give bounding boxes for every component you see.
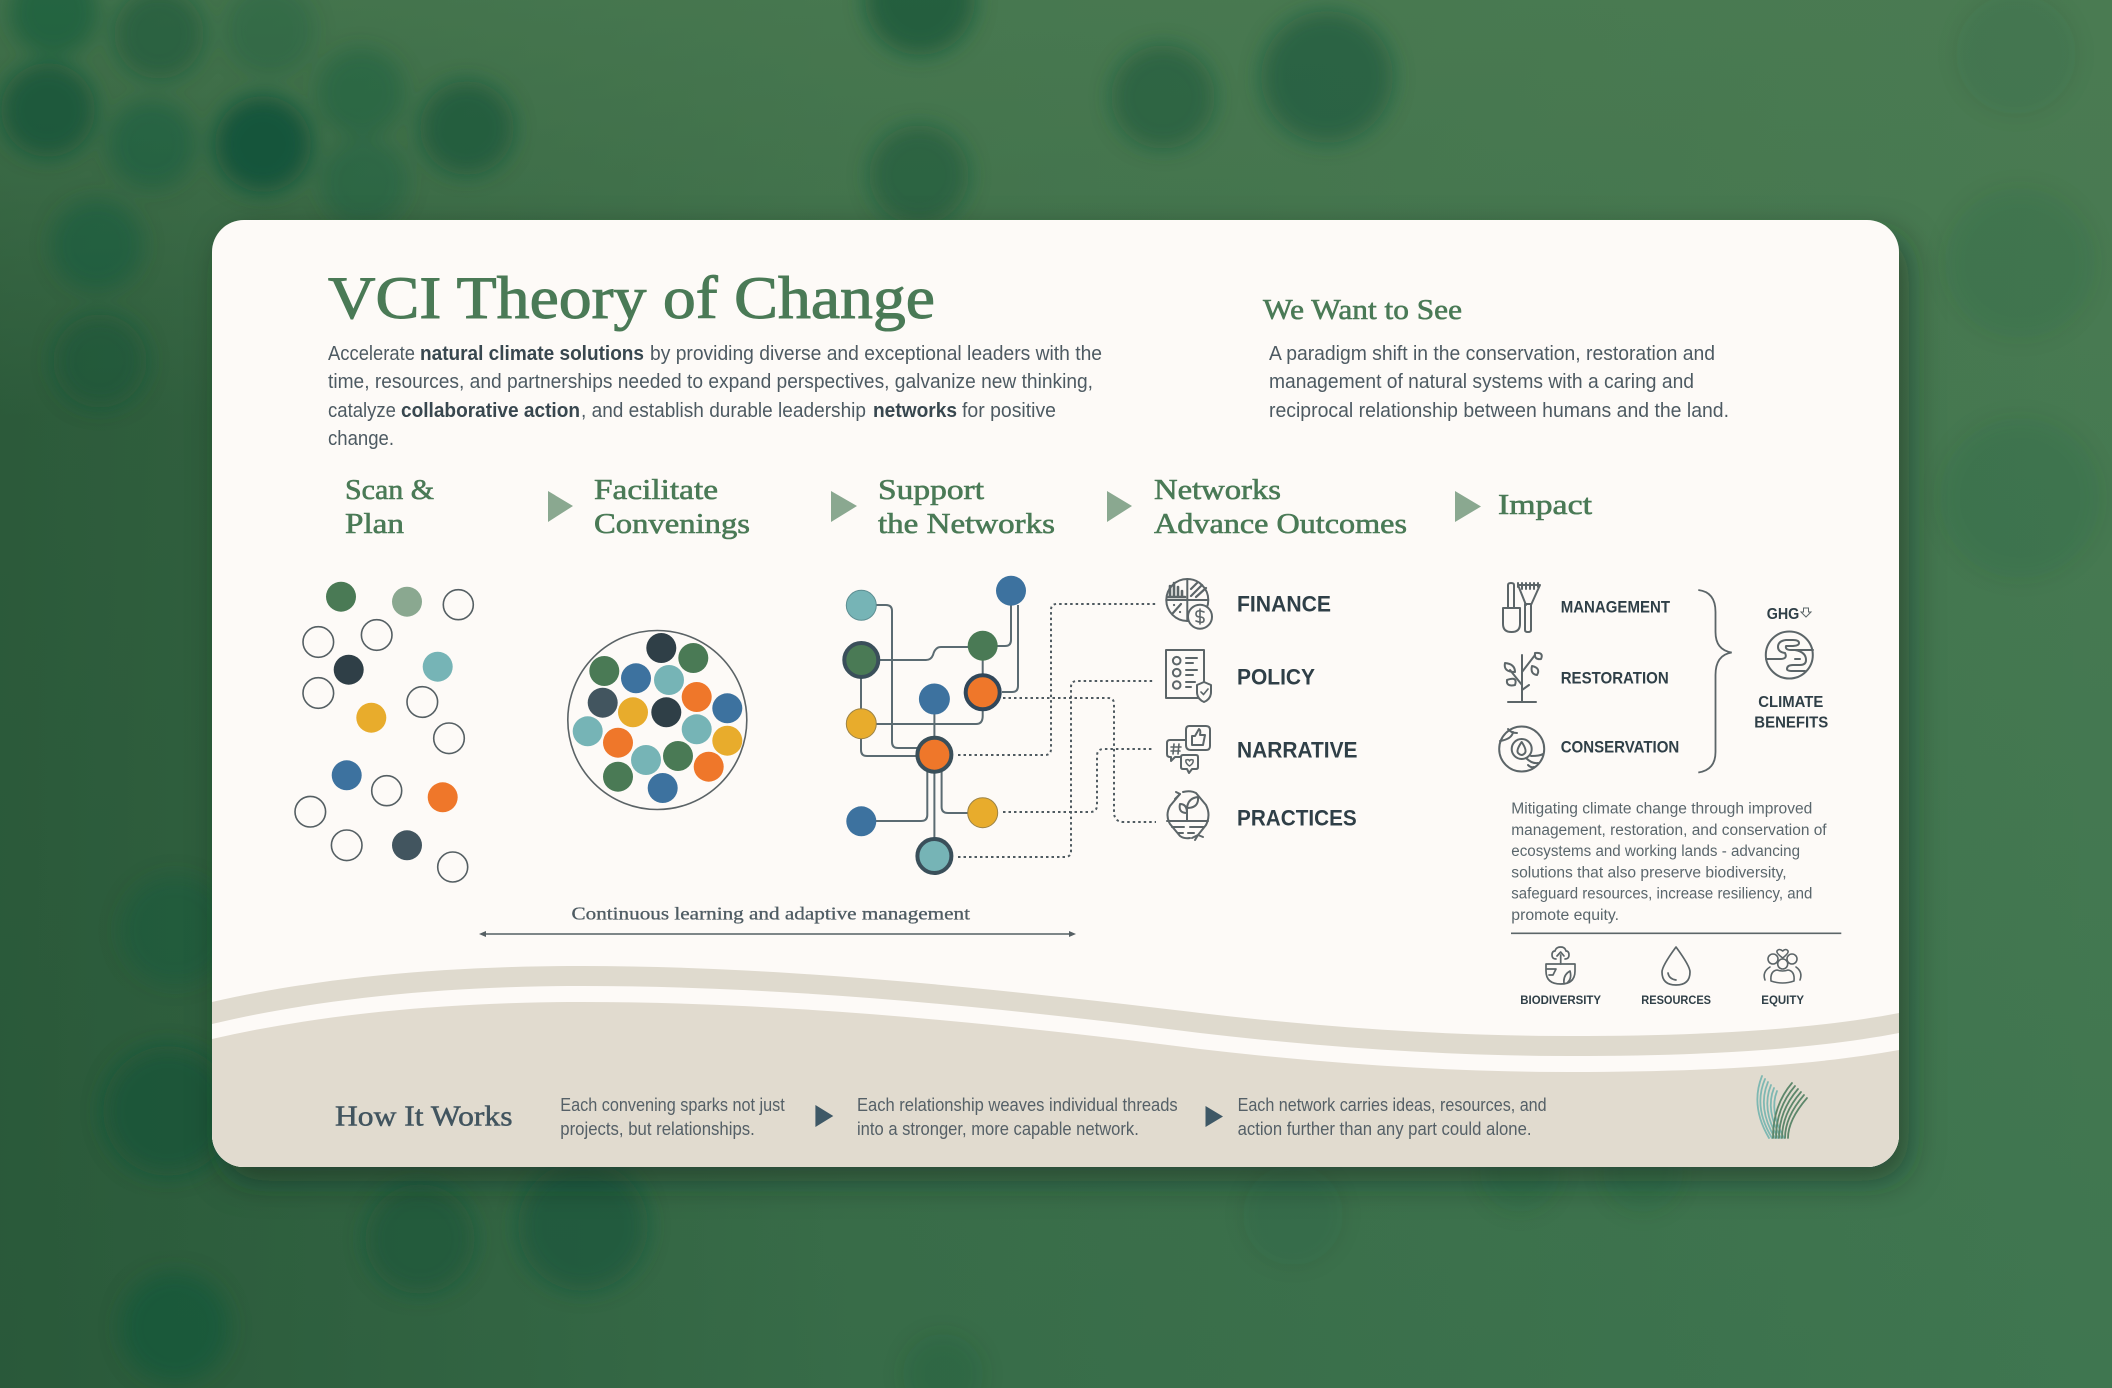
intro paragraph: Accelerate bbox=[328, 343, 415, 365]
paragraph: we want to see: management of natural systems with a caring and bbox=[1269, 371, 1694, 393]
text: how it works step 1 bbox=[560, 1094, 785, 1139]
paragraph: we want to see: reciprocal relationship between humans and the land. bbox=[1269, 400, 1729, 422]
arrow: how it works 2 bbox=[1206, 1106, 1223, 1127]
icon: narrative bbox=[1167, 726, 1210, 773]
icon: policy bbox=[1166, 650, 1211, 702]
diagram: convening circle bbox=[568, 630, 747, 810]
label: management: MANAGEMENT bbox=[1561, 598, 1670, 616]
paragraph: impact description: ecosystems and working lands - advancing bbox=[1511, 843, 1800, 860]
icon: resources drop bbox=[1662, 947, 1690, 985]
diagram: scattered circles bbox=[295, 582, 473, 882]
label: GHG: GHG bbox=[1767, 606, 1799, 623]
footer waves bbox=[212, 966, 1899, 1167]
label: conservation: CONSERVATION bbox=[1561, 739, 1679, 757]
heading: scan and plan bbox=[345, 474, 434, 540]
label: policy: POLICY bbox=[1237, 664, 1315, 689]
caption: continuous learning: Continuous learning and adaptive management bbox=[572, 903, 970, 923]
paragraph: we want to see: A paradigm shift in the conservation, restoration and bbox=[1269, 343, 1715, 365]
icon: practices bbox=[1167, 791, 1208, 840]
brace bbox=[1698, 590, 1732, 772]
heading: networks advance outcomes bbox=[1154, 474, 1407, 540]
text: how it works step 1: projects, but relationships. bbox=[560, 1118, 755, 1139]
intro paragraph bbox=[328, 343, 1102, 450]
text: how it works step 2 bbox=[857, 1094, 1178, 1139]
arrow: step 4 to 5 bbox=[1455, 491, 1481, 522]
paragraph: impact description: safeguard resources, increase resiliency, and bbox=[1511, 886, 1812, 903]
label: equity: EQUITY bbox=[1761, 993, 1804, 1007]
arrow: step 1 to 2 bbox=[548, 491, 573, 522]
text: how it works step 2: Each relationship weaves individual threads bbox=[857, 1094, 1178, 1115]
label: climate benefits: CLIMATE bbox=[1758, 694, 1824, 711]
arrow: how it works 1 bbox=[815, 1105, 833, 1127]
arrow: step 2 to 3 bbox=[831, 491, 857, 522]
paragraph: impact description bbox=[1511, 800, 1827, 924]
heading: facilitate convenings: Facilitate bbox=[594, 474, 718, 506]
paragraph: impact description: management, restoration, and conservation of bbox=[1511, 822, 1827, 839]
intro paragraph: networks bbox=[873, 400, 957, 422]
arrow: continuous learning double-headed bbox=[479, 931, 1076, 937]
text: how it works step 3 bbox=[1238, 1094, 1547, 1139]
heading: support the networks: the Networks bbox=[878, 508, 1055, 540]
icon: biodiversity bbox=[1546, 947, 1575, 984]
label: narrative: NARRATIVE bbox=[1237, 737, 1358, 762]
heading: facilitate convenings bbox=[594, 474, 750, 540]
diagram: network graph bbox=[844, 576, 1157, 873]
text: how it works step 1: Each convening sparks not just bbox=[560, 1094, 785, 1115]
icon: management tools bbox=[1503, 583, 1540, 632]
heading: support the networks: Support bbox=[878, 474, 984, 506]
heading: networks advance outcomes: Advance Outcomes bbox=[1154, 508, 1407, 540]
paragraph: impact description: promote equity. bbox=[1511, 907, 1619, 924]
arrow: step 3 to 4 bbox=[1107, 491, 1132, 522]
text: how it works step 3: action further than any part could alone. bbox=[1238, 1118, 1532, 1139]
paragraph: we want to see bbox=[1269, 343, 1729, 422]
heading: we want to see: We Want to See bbox=[1263, 294, 1462, 326]
heading: how it works: How It Works bbox=[335, 1101, 512, 1133]
label: practices: PRACTICES bbox=[1237, 806, 1357, 831]
intro paragraph: catalyze bbox=[328, 400, 396, 422]
heading: networks advance outcomes: Networks bbox=[1154, 474, 1281, 506]
heading: support the networks bbox=[878, 474, 1055, 540]
intro paragraph: , and establish durable leadership bbox=[581, 400, 866, 422]
title: VCI Theory of Change bbox=[328, 265, 935, 331]
heading: impact: Impact bbox=[1498, 489, 1592, 521]
icon: equity group bbox=[1764, 950, 1801, 983]
intro paragraph: natural climate solutions bbox=[420, 343, 644, 365]
heading: scan and plan: Plan bbox=[345, 508, 405, 540]
icon: finance bbox=[1166, 579, 1212, 629]
label: biodiversity: BIODIVERSITY bbox=[1520, 993, 1601, 1007]
paragraph: impact description: Mitigating climate change through improved bbox=[1511, 800, 1812, 817]
intro paragraph: by providing diverse and exceptional leaders with the bbox=[650, 343, 1102, 365]
text: how it works step 3: Each network carries ideas, resources, and bbox=[1238, 1094, 1547, 1115]
heading: scan and plan: Scan & bbox=[345, 474, 434, 506]
label: restoration: RESTORATION bbox=[1561, 670, 1669, 688]
label: climate benefits: BENEFITS bbox=[1754, 715, 1829, 732]
intro paragraph: collaborative action bbox=[401, 400, 580, 422]
text: how it works step 2: into a stronger, more capable network. bbox=[857, 1118, 1139, 1139]
intro paragraph: for positive bbox=[962, 400, 1056, 422]
panel: theory of change card bbox=[212, 220, 1899, 1167]
label: resources: RESOURCES bbox=[1641, 993, 1711, 1007]
logo: grass blades bbox=[1757, 1076, 1807, 1138]
paragraph: impact description: solutions that also preserve biodiversity, bbox=[1511, 864, 1787, 881]
intro paragraph: time, resources, and partnerships needed to expand perspectives, galvanize new thinking, bbox=[328, 371, 1093, 393]
label: finance: FINANCE bbox=[1237, 592, 1331, 617]
icon: climate globe bbox=[1766, 632, 1813, 678]
icon: conservation bbox=[1499, 726, 1544, 772]
intro paragraph: change. bbox=[328, 428, 394, 450]
label: climate benefits bbox=[1754, 694, 1829, 732]
icon: restoration plant bbox=[1505, 653, 1542, 702]
heading: facilitate convenings: Convenings bbox=[594, 508, 750, 540]
